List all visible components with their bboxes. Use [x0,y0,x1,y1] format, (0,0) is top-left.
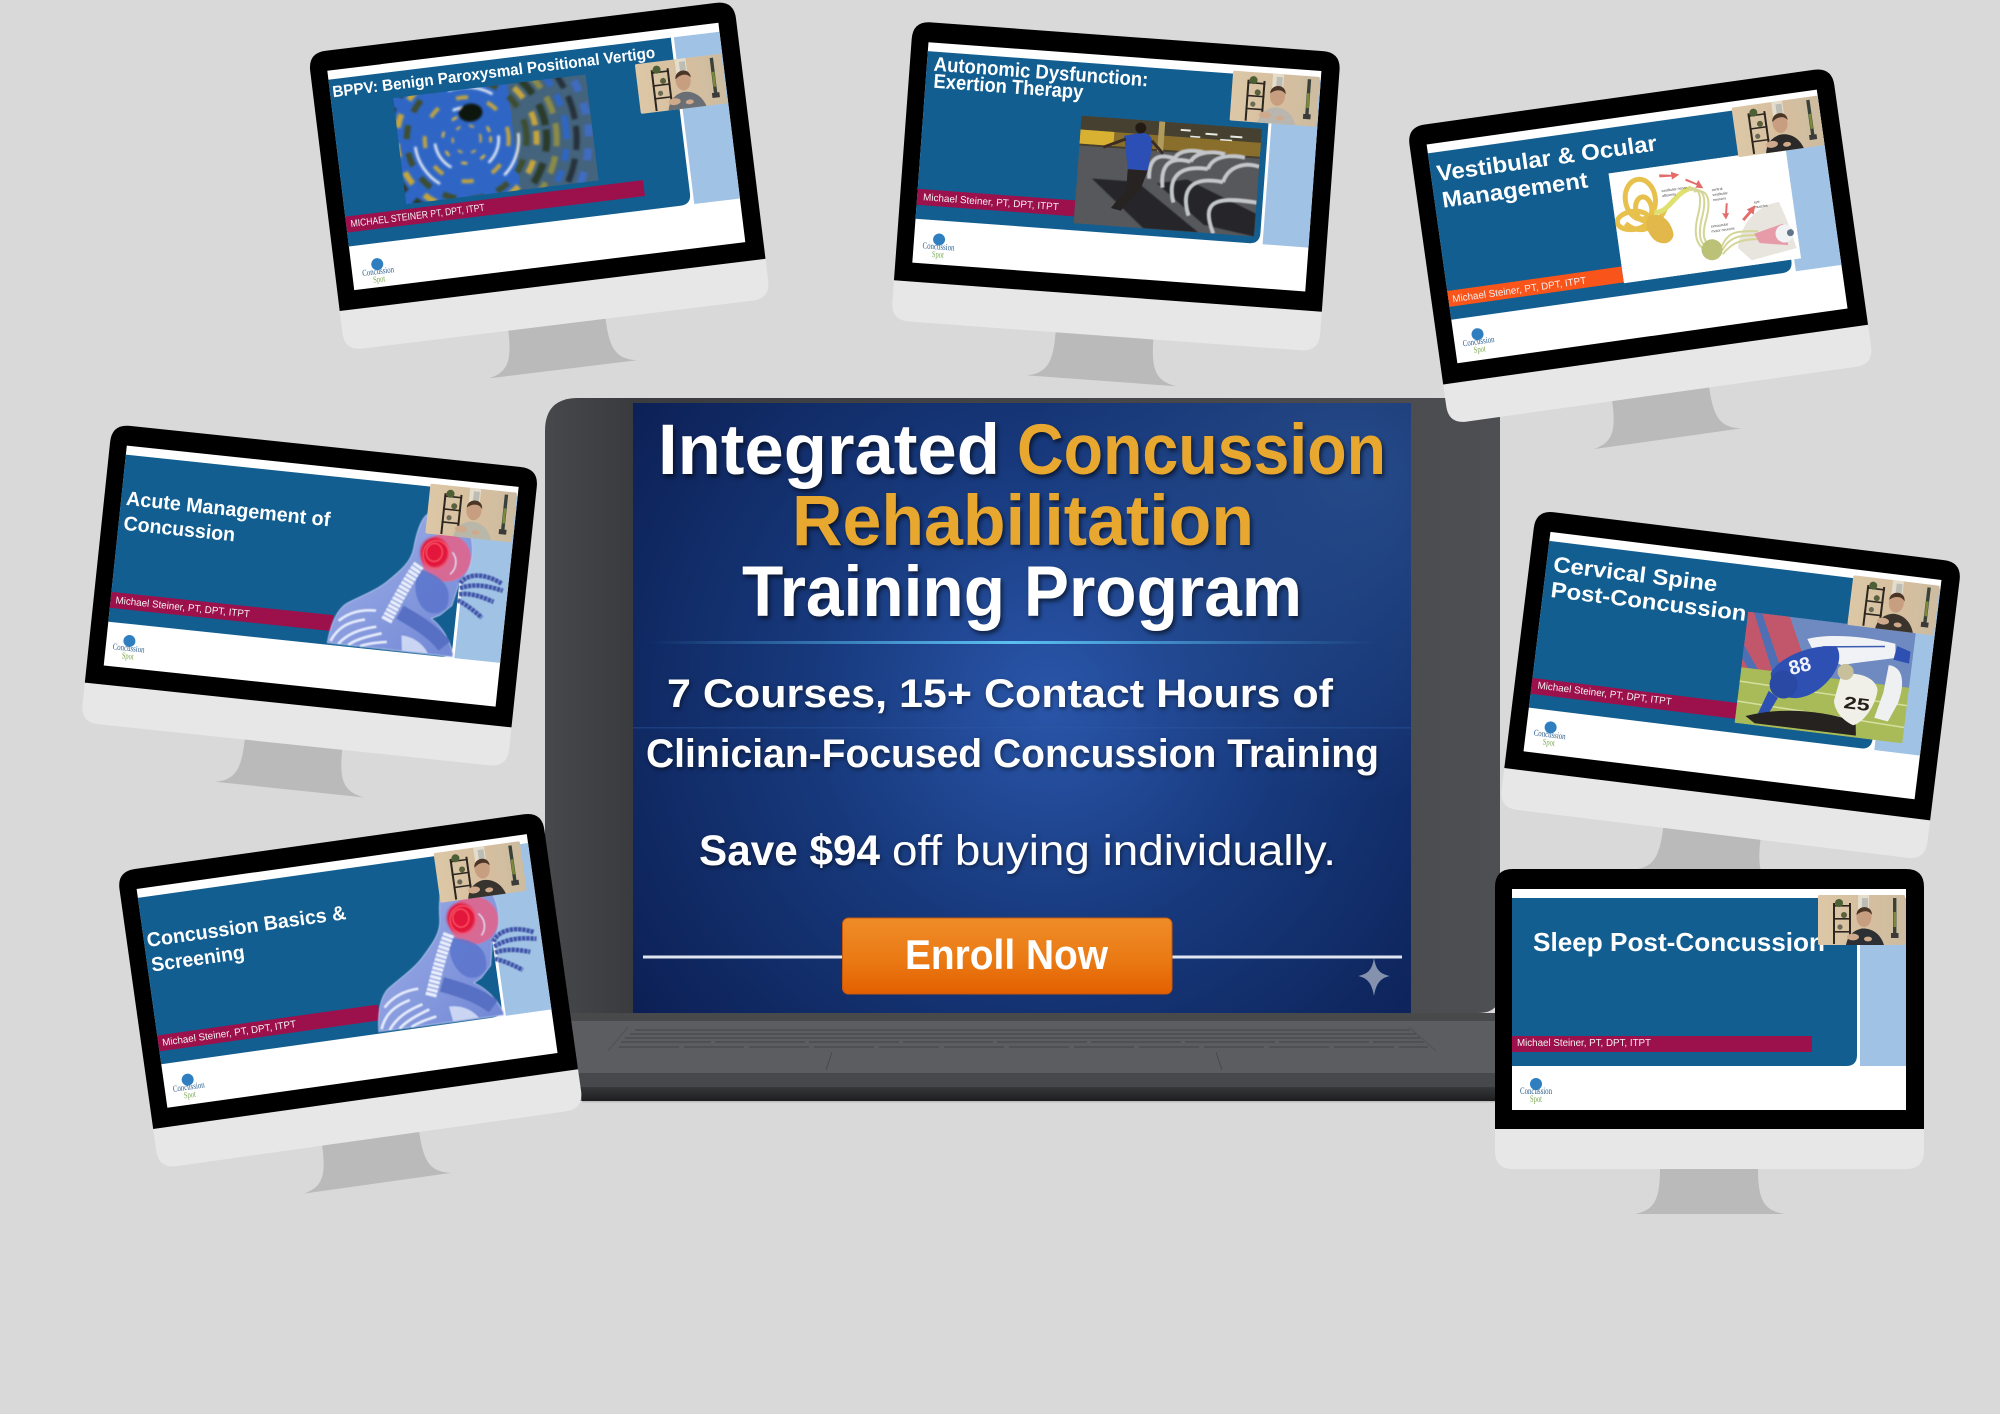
monitor: Cervical Spine [1494,510,1962,905]
logo: Spot [1473,343,1487,355]
webcam [635,54,727,114]
logo [1532,719,1568,749]
diagram: vestibular pathway: motor neurons [1711,226,1735,234]
diagram: vestibular pathway: afferents [1662,192,1676,198]
logo: Spot [1542,737,1556,748]
laptop lid [545,398,1500,1013]
title: BPPV: Benign Paroxysmal Positional Vertigo [331,45,656,101]
presenter bar [1531,678,1738,719]
main title: Training Program [742,553,1302,632]
main title: Concussion [1017,411,1386,490]
title: Cervical Spine [1552,552,1719,597]
laptop [545,398,1500,1102]
presenter name: Michael Steiner, PT, DPT, ITPT [1517,1038,1651,1049]
logo: Spot [1530,1094,1542,1104]
title: Sleep Post-Concussion [1533,927,1825,957]
presenter bar [110,592,333,631]
logo: Concussion [922,240,955,253]
main title: Rehabilitation [792,482,1254,561]
presenter bar [1447,267,1624,307]
title: Exertion Therapy [933,71,1085,104]
photo: football tackle [1734,612,1916,744]
logo: Concussion [1533,727,1567,741]
logo: Spot [121,650,135,662]
presenter name: Michael Steiner, PT, DPT, ITPT [162,1019,297,1049]
title: Screening [150,942,246,977]
title: Post-Concussion [1549,577,1748,626]
subtitle [646,672,1379,776]
logo: Spot [373,273,386,285]
monitor: Autonomic Dysfunction [888,21,1341,396]
main title [658,411,1386,632]
presenter name: MICHAEL STEINER PT, DPT, ITPT [350,203,485,230]
logo: Concussion [172,1079,206,1094]
presenter bar [917,189,1075,216]
diagram: vestibular pathway [1608,150,1801,284]
monitor: Vestibular and Ocular [1407,67,1880,469]
diagram: vestibular pathway: central [1711,187,1723,192]
main title: Integrated [658,411,1000,490]
logo [1520,1078,1552,1104]
button rule [643,956,1402,958]
logo [111,633,146,663]
title [932,54,1149,108]
illustration: skeleton with head injury [359,865,546,1033]
diagram: vestibular pathway: extraocular [1711,222,1730,229]
presenter name: Michael Steiner, PT, DPT, ITPT [1452,276,1587,305]
title: Acute Management of [125,488,332,531]
diagram: vestibular pathway: eye [1754,200,1760,204]
runner [1122,132,1153,171]
savings line: off buying individually. [892,827,1336,875]
presenter name: Michael Steiner, PT, DPT, ITPT [1537,681,1672,708]
diagram: vestibular pathway: muscles [1754,204,1768,209]
logo: Concussion [1462,334,1495,348]
photo: spinning trees [393,74,598,204]
title: Vestibular & Ocular [1435,130,1659,186]
subtitle: Clinician-Focused Concussion Training [646,732,1379,776]
logo: Concussion [362,264,395,278]
diagram: vestibular pathway: vestibular nerve [1661,186,1687,193]
presenter bar [345,180,645,233]
monitor: Sleep [1495,869,1924,1214]
logo [1461,326,1497,356]
enroll button [842,918,1172,994]
webcam [1230,71,1320,127]
monitor: Concussion Basics [117,812,590,1213]
title: Concussion Basics & [145,902,348,952]
monitor: Acute Management [76,424,539,812]
webcam [425,484,517,542]
title [1435,130,1662,213]
webcam [434,841,527,903]
title: Concussion [122,513,236,546]
webcam [1731,96,1825,157]
savings line: Save $94 [699,827,880,875]
photo: football tackle: 88 [1786,653,1814,680]
diagram: vestibular pathway: neurons [1713,196,1726,202]
webcam [1847,575,1940,635]
presenter name: Michael Steiner, PT, DPT, ITPT [115,595,250,620]
title [1549,552,1751,626]
presenter bar [157,1004,380,1051]
title: Autonomic Dysfunction: [933,54,1149,91]
presenter bar [1512,1036,1812,1052]
glow divider [650,641,1375,644]
logo: Concussion [112,641,145,655]
icon: sparkle star [1358,958,1390,996]
logo [361,256,396,286]
monitor: BPPV [306,0,776,395]
subtitle: 7 Courses, 15+ Contact Hours of [667,672,1334,716]
title [145,902,351,977]
photo: football tackle: 25 [1843,693,1871,715]
laptop base [570,1013,1496,1102]
presenter name: Michael Steiner, PT, DPT, ITPT [923,192,1059,213]
savings line [699,827,1336,875]
enroll button: Enroll Now [905,931,1108,978]
logo: Concussion [1520,1086,1552,1096]
title [122,488,332,556]
illustration: skeleton with head injury [327,499,510,661]
diagram: vestibular pathway: vestibular [1712,191,1729,197]
logo: Spot [183,1089,197,1100]
logo [922,232,956,261]
laptop screen background [633,403,1411,1013]
photo: treadmills [1074,116,1262,236]
logo [171,1071,207,1102]
logo: Spot [932,249,945,260]
title: Management [1440,167,1590,213]
webcam [1818,895,1905,945]
